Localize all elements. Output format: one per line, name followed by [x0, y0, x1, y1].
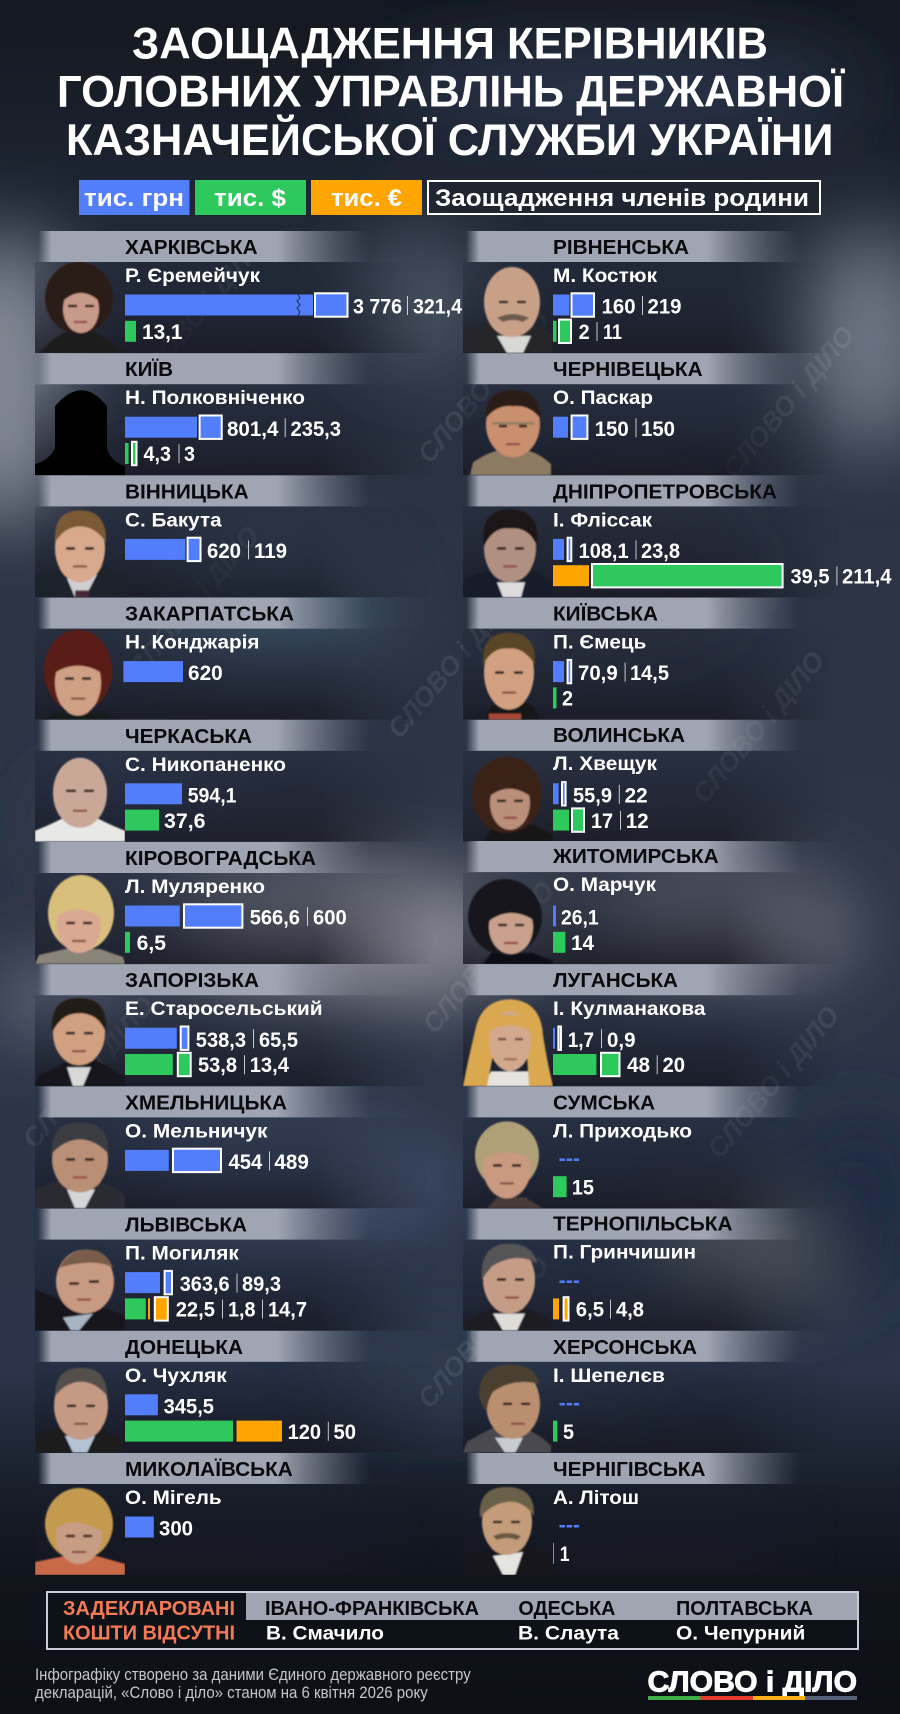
- savings bars: [125, 538, 287, 563]
- savings bars: 801,4: [227, 418, 279, 441]
- watermarks: СЛОВО і ДІЛО: [412, 1251, 555, 1414]
- region heading: [38, 353, 370, 384]
- savings bars: 3: [184, 443, 195, 466]
- region heading: [38, 598, 370, 629]
- savings bars: [123, 661, 223, 685]
- region heading: МИКОЛАЇВСЬКА: [125, 1458, 293, 1481]
- portrait: [35, 1249, 125, 1331]
- savings bars: 14,7: [268, 1299, 307, 1322]
- savings bars: 150: [641, 418, 675, 441]
- savings bars: 566,6: [250, 907, 300, 930]
- legend: [79, 180, 820, 215]
- card: Рівненська: [463, 231, 838, 353]
- savings bars: [125, 1026, 298, 1077]
- savings bars: [553, 538, 892, 588]
- region heading: ЧЕРНІВЕЦЬКА: [553, 358, 703, 381]
- legend: тис. €: [331, 185, 402, 212]
- savings bars: 55,9: [573, 784, 612, 807]
- region heading: [466, 1453, 800, 1484]
- region heading: [38, 1453, 370, 1484]
- savings bars: 6,5: [137, 932, 166, 955]
- legend: Заощадження членів родини: [435, 185, 809, 212]
- no funds label: [63, 1597, 235, 1644]
- card: Закарпатська: [35, 598, 435, 720]
- portrait: [463, 1365, 551, 1453]
- savings bars: 600: [313, 907, 347, 930]
- savings bars: [125, 783, 237, 833]
- savings bars: [553, 1514, 580, 1566]
- logo: СЛОВО і ДІЛО: [648, 1667, 857, 1699]
- title: [57, 20, 846, 165]
- person name: С. Бакута: [125, 509, 222, 531]
- savings bars: 321,4: [413, 296, 462, 319]
- savings bars: 6,5: [576, 1299, 604, 1322]
- card: Донецька: [35, 1330, 380, 1453]
- savings bars: ---: [559, 1392, 580, 1415]
- region heading: КИЇВСЬКА: [553, 603, 658, 626]
- portrait: [470, 508, 546, 598]
- portrait: [463, 267, 553, 353]
- savings bars: 14,5: [630, 662, 669, 685]
- region heading: [466, 841, 800, 872]
- region heading: ЖИТОМИРСЬКА: [552, 845, 719, 868]
- region heading: [38, 964, 370, 995]
- person name: С. Никопаненко: [125, 754, 286, 776]
- region heading: ХЕРСОНСЬКА: [553, 1336, 697, 1359]
- portrait: [35, 1122, 125, 1208]
- region heading: [466, 1331, 800, 1362]
- savings bars: [553, 1270, 644, 1322]
- person name: П. Могиляк: [125, 1243, 239, 1265]
- savings bars: 14: [571, 932, 594, 955]
- card: Херсонська: [463, 1331, 838, 1453]
- savings bars: 620: [188, 662, 223, 685]
- person name: Л. Приходько: [553, 1120, 692, 1142]
- region heading: ЗАКАРПАТСЬКА: [125, 603, 294, 626]
- savings bars: 39,5: [790, 565, 830, 588]
- no funds label: КОШТИ ВІДСУТНІ: [63, 1622, 235, 1644]
- portrait: [44, 630, 115, 720]
- savings bars: [553, 1147, 594, 1199]
- savings bars: ---: [559, 1270, 580, 1293]
- savings bars: 70,9: [578, 662, 618, 685]
- savings bars: [553, 906, 599, 955]
- portrait: [35, 875, 125, 964]
- watermarks: СЛОВО і ДІЛО: [687, 646, 830, 809]
- Одеська: ОДЕСЬКА: [518, 1597, 616, 1620]
- region heading: [466, 231, 800, 262]
- savings bars: [125, 1149, 309, 1174]
- portrait: [472, 757, 553, 842]
- region heading: [466, 720, 800, 751]
- region heading: [38, 720, 370, 751]
- region heading: [466, 1209, 800, 1240]
- portrait: [40, 262, 125, 353]
- card: Волинська: [463, 720, 838, 842]
- region heading: [38, 1331, 370, 1362]
- savings bars: 454: [228, 1151, 263, 1174]
- savings bars: 53,8: [198, 1054, 237, 1077]
- portrait: [35, 998, 125, 1086]
- card: Тернопільська: [463, 1209, 838, 1331]
- portrait: [35, 758, 125, 842]
- region heading: ТЕРНОПІЛЬСЬКА: [553, 1212, 733, 1235]
- person name: М. Костюк: [553, 265, 657, 287]
- savings bars: 2: [579, 321, 590, 344]
- savings bars: [125, 1271, 307, 1322]
- Івано-Франківська: [265, 1597, 479, 1644]
- card: Луганська: [463, 964, 838, 1086]
- savings bars: 37,6: [164, 810, 206, 833]
- portrait: [35, 1368, 123, 1453]
- title: ЗАОЩАДЖЕННЯ КЕРІВНИКІВ: [132, 20, 768, 68]
- region heading: ВІННИЦЬКА: [125, 480, 249, 503]
- savings bars: 0,9: [607, 1029, 636, 1052]
- person name: І. Кулманакова: [553, 998, 706, 1020]
- region heading: ЛУГАНСЬКА: [553, 969, 678, 992]
- savings bars: [553, 1392, 580, 1444]
- watermarks: СЛОВО і ДІЛО: [717, 321, 860, 484]
- Івано-Франківська: ІВАНО-ФРАНКІВСЬКА: [265, 1597, 479, 1620]
- card: Сумська: [463, 1086, 838, 1208]
- savings bars: 23,8: [641, 540, 680, 563]
- savings bars: 4,3: [144, 443, 171, 466]
- region heading: [38, 475, 370, 506]
- savings bars: 12: [626, 810, 649, 833]
- person name: О. Марчук: [553, 874, 656, 896]
- savings bars: 65,5: [259, 1029, 298, 1052]
- Одеська: В. Слаута: [518, 1622, 619, 1644]
- card: Харківська: [35, 231, 462, 353]
- card: Вінницька: [35, 475, 435, 597]
- card: Миколаївська: [35, 1453, 435, 1575]
- savings bars: 20: [662, 1054, 685, 1077]
- legend: тис. $: [214, 185, 287, 212]
- savings bars: 119: [254, 540, 287, 563]
- person name: І. Шепелєв: [553, 1365, 665, 1387]
- card: Київська: [463, 598, 838, 720]
- Одеська: [518, 1597, 619, 1644]
- savings bars: 5: [563, 1421, 574, 1444]
- watermarks: СЛОВО і ДІЛО: [127, 231, 270, 394]
- region heading: ВОЛИНСЬКА: [553, 724, 685, 747]
- region heading: [38, 1086, 370, 1117]
- savings bars: 363,6: [180, 1273, 230, 1296]
- watermarks: СЛОВО і ДІЛО: [382, 581, 525, 744]
- no funds label: ЗАДЕКЛАРОВАНІ: [63, 1597, 235, 1620]
- person name: Е. Старосельський: [125, 998, 323, 1020]
- region heading: ЧЕРНІГІВСЬКА: [553, 1458, 706, 1481]
- source note: [35, 1666, 471, 1702]
- savings bars: 22: [625, 784, 648, 807]
- savings bars: 1: [560, 1543, 570, 1566]
- region heading: [466, 964, 800, 995]
- savings bars: ---: [559, 1514, 580, 1537]
- savings bars: 89,3: [242, 1273, 281, 1296]
- portrait: [463, 999, 553, 1086]
- region heading: [466, 475, 800, 506]
- person name: О. Чухляк: [125, 1365, 227, 1387]
- portrait: [50, 510, 107, 598]
- person name: А. Літош: [553, 1487, 639, 1509]
- savings bars: 13,1: [142, 321, 183, 344]
- savings bars: [125, 416, 341, 466]
- savings bars: 620: [207, 540, 241, 563]
- savings bars: 50: [334, 1421, 356, 1444]
- person name: О. Паскар: [553, 387, 653, 409]
- card: Чернігівська: [463, 1453, 838, 1575]
- savings bars: [553, 1026, 685, 1077]
- watermarks: СЛОВО і ДІЛО: [412, 306, 555, 469]
- savings bars: [553, 293, 682, 344]
- savings bars: 22,5: [176, 1299, 215, 1322]
- region heading: ЛЬВІВСЬКА: [125, 1214, 247, 1237]
- Івано-Франківська: В. Смачило: [266, 1622, 384, 1644]
- region heading: РІВНЕНСЬКА: [553, 236, 689, 259]
- portrait: [475, 1121, 543, 1208]
- savings bars: 11: [603, 321, 622, 344]
- savings bars: 219: [648, 296, 682, 319]
- region heading: [466, 353, 800, 384]
- savings bars: 26,1: [561, 907, 599, 930]
- region heading: ЧЕРКАСЬКА: [125, 725, 252, 748]
- watermarks: СЛОВО і ДІЛО: [17, 991, 160, 1154]
- source note: декларацій, «Слово і діло» станом на 6 квітня 2026 року: [35, 1684, 428, 1702]
- savings bars: 120: [288, 1421, 321, 1444]
- card: Дніпропетровська: [463, 475, 892, 597]
- person name: О. Мельничук: [125, 1120, 268, 1142]
- Полтавська: О. Чепурний: [676, 1622, 805, 1644]
- region heading: ЗАПОРІЗЬКА: [125, 969, 259, 992]
- savings bars: [125, 1516, 193, 1541]
- savings bars: 594,1: [188, 784, 237, 807]
- region heading: [466, 598, 800, 629]
- savings bars: 48: [627, 1054, 650, 1077]
- person name: Л. Хвещук: [553, 753, 657, 775]
- portrait: [483, 633, 541, 720]
- savings bars: [125, 293, 462, 344]
- region heading: [38, 231, 370, 262]
- savings bars: 160: [602, 296, 636, 319]
- card: Кіровоградська: [35, 842, 435, 964]
- person name: П. Гринчишин: [553, 1241, 696, 1263]
- savings bars: [553, 660, 669, 711]
- card: Черкаська: [35, 720, 435, 842]
- region heading: ДНІПРОПЕТРОВСЬКА: [553, 480, 777, 503]
- Полтавська: ПОЛТАВСЬКА: [676, 1597, 813, 1620]
- savings bars: [125, 904, 347, 955]
- region heading: КИЇВ: [125, 358, 173, 381]
- source note: Інфографіку створено за даними Єдиного державного реєстру: [35, 1666, 471, 1684]
- region heading: ХМЕЛЬНИЦЬКА: [125, 1091, 287, 1114]
- portrait: silhouette: [35, 390, 125, 475]
- legend: тис. грн: [84, 185, 184, 212]
- savings bars: 2: [562, 688, 573, 711]
- savings bars: 150: [595, 418, 629, 441]
- savings bars: [125, 1394, 356, 1444]
- person name: Н. Конджарія: [125, 632, 260, 654]
- region heading: ХАРКІВСЬКА: [125, 236, 258, 259]
- savings bars: 538,3: [196, 1029, 246, 1052]
- region heading: [466, 1086, 800, 1117]
- watermarks: [17, 231, 860, 1414]
- savings bars: 345,5: [164, 1395, 214, 1418]
- person name: П. Ємець: [553, 632, 646, 654]
- watermarks: СЛОВО і ДІЛО: [702, 1001, 845, 1164]
- savings bars: 3 776: [353, 296, 402, 319]
- savings bars: 17: [591, 810, 613, 833]
- portrait: [468, 879, 553, 964]
- region heading: [38, 1209, 370, 1240]
- savings bars: 300: [159, 1518, 193, 1541]
- savings bars: [553, 782, 649, 833]
- watermarks: СЛОВО і ДІЛО: [122, 521, 265, 684]
- card: Київ: [35, 353, 435, 475]
- card: Житомирська: [463, 841, 838, 964]
- savings bars: 13,4: [250, 1054, 289, 1077]
- savings bars: 4,8: [616, 1299, 644, 1322]
- savings bars: 108,1: [579, 540, 629, 563]
- savings bars: [553, 416, 675, 441]
- savings bars: 235,3: [290, 418, 341, 441]
- card: Запорізька: [35, 964, 435, 1086]
- watermarks: СЛОВО і ДІЛО: [417, 876, 560, 1039]
- person name: І. Фліссак: [553, 509, 652, 531]
- savings bars: 489: [274, 1151, 309, 1174]
- person name: О. Мігель: [125, 1487, 222, 1509]
- region heading: СУМСЬКА: [553, 1091, 655, 1114]
- region heading: КІРОВОГРАДСЬКА: [125, 847, 316, 870]
- Полтавська: [676, 1597, 813, 1644]
- portrait: [463, 1487, 553, 1575]
- person name: Р. Єремейчук: [125, 265, 260, 287]
- panel: no declared funds: [47, 1592, 858, 1649]
- savings bars: 1,8: [228, 1299, 256, 1322]
- title: ГОЛОВНИХ УПРАВЛІНЬ ДЕРЖАВНОЇ: [57, 68, 846, 117]
- savings bars: 15: [572, 1176, 594, 1199]
- savings bars: 1,7: [568, 1029, 594, 1052]
- card: Львівська: [35, 1209, 435, 1331]
- savings bars: ---: [559, 1147, 580, 1170]
- card: Чернівецька: [463, 353, 838, 475]
- savings bars: 211,4: [842, 565, 892, 588]
- title: КАЗНАЧЕЙСЬКОЇ СЛУЖБИ УКРАЇНИ: [66, 114, 834, 165]
- card: Хмельницька: [35, 1086, 435, 1208]
- person name: Л. Муляренко: [125, 876, 265, 898]
- portrait: [470, 390, 551, 475]
- portrait: [463, 1244, 553, 1331]
- region heading: [38, 842, 370, 873]
- portrait: [35, 1488, 125, 1575]
- person name: Н. Полковніченко: [125, 387, 305, 409]
- region heading: ДОНЕЦЬКА: [125, 1336, 243, 1359]
